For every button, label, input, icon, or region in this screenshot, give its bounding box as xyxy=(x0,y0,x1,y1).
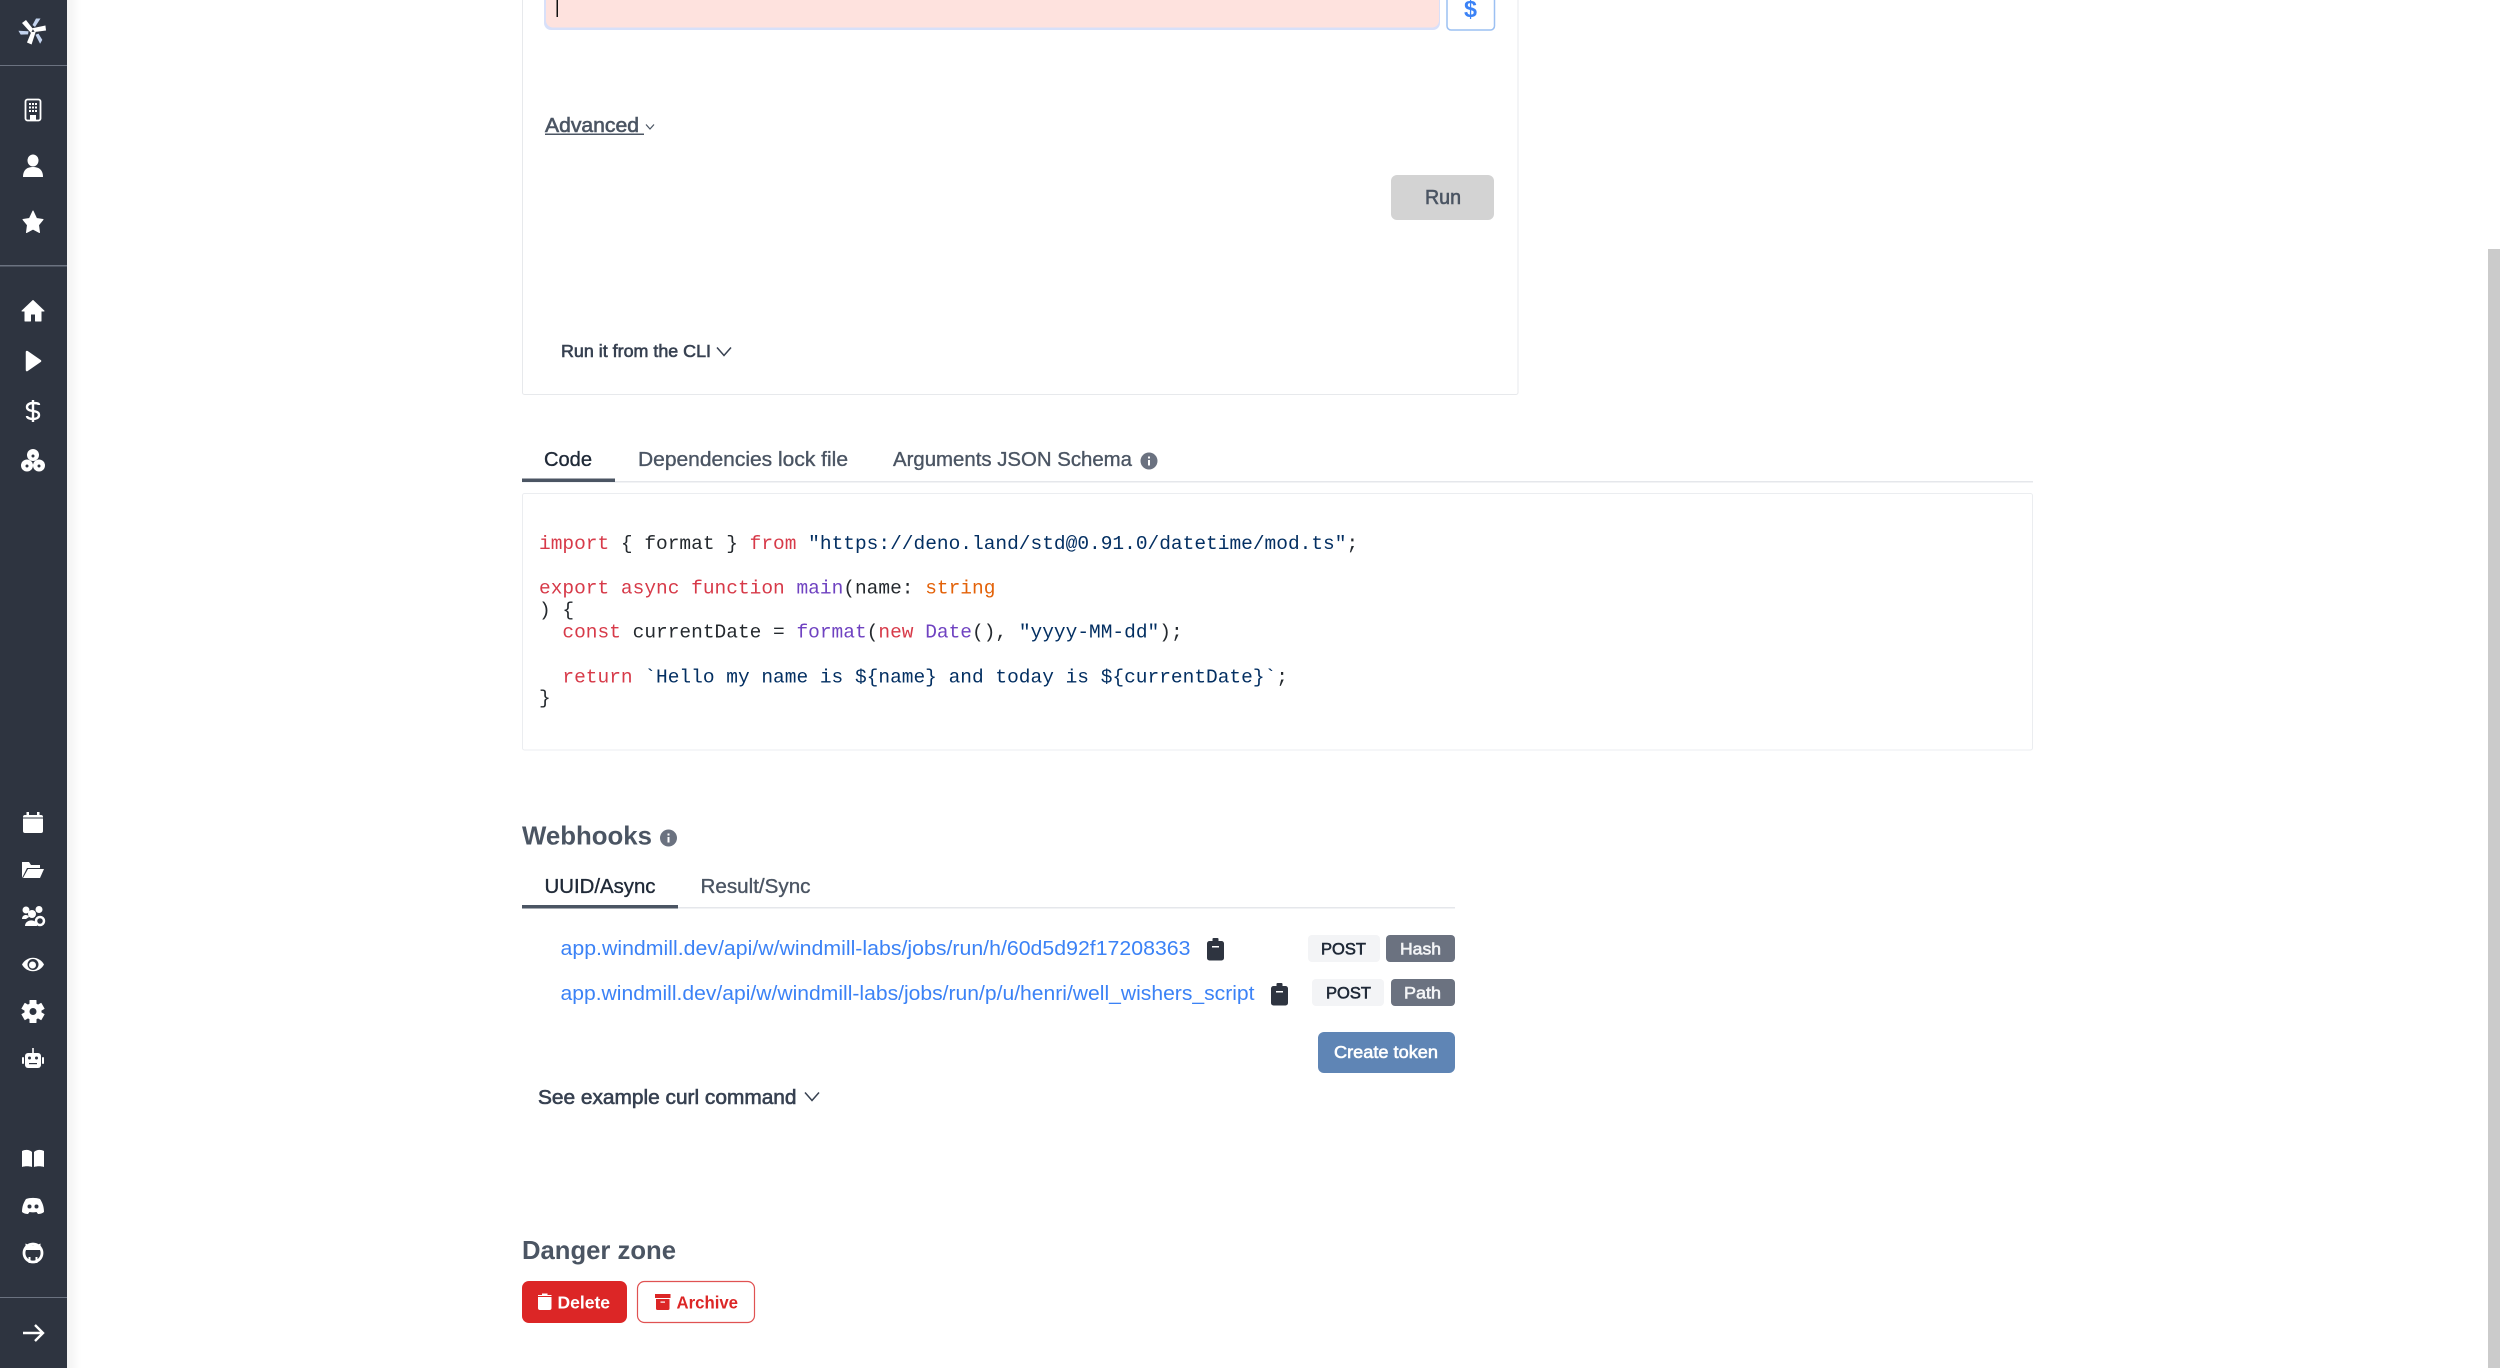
curl command toggle: See example curl command xyxy=(538,1087,796,1109)
icon: windmill logo xyxy=(18,18,48,46)
badge: POST: POST xyxy=(1326,984,1371,1002)
tabs: code tabs: Code xyxy=(544,449,592,471)
icon: info xyxy=(1140,452,1158,470)
icon: star xyxy=(23,211,43,232)
icon: play xyxy=(27,352,40,370)
webhook row: path: app.windmill.dev/api/w/windmill-labs/jobs/run/p/u/henri/well_wishers_script xyxy=(560,983,1255,1005)
tabs: webhook tabs: Result/Sync xyxy=(700,876,810,898)
icon: building xyxy=(26,100,40,120)
icon: settings gear xyxy=(22,1000,44,1022)
button: archive xyxy=(638,1282,754,1322)
panel: code block: return `Hello my name is ${name} and today is ${currentDate}`; xyxy=(539,666,1288,688)
icon: book xyxy=(22,1150,44,1167)
icon: user xyxy=(23,154,43,177)
icon: clipboard xyxy=(1271,983,1288,1006)
button: create token: Create token xyxy=(1334,1042,1438,1062)
icon: expand arrow xyxy=(23,1325,43,1341)
panel: code block: ) { xyxy=(539,600,574,622)
panel: code block xyxy=(522,494,2032,750)
webhook row: hash: app.windmill.dev/api/w/windmill-labs/jobs/run/h/60d5d92f17208363 xyxy=(560,938,1190,960)
sidebar xyxy=(0,0,67,1368)
button: create token xyxy=(1318,1032,1455,1073)
run button xyxy=(1391,175,1494,220)
badge: Path xyxy=(1391,979,1455,1006)
webhook row: path xyxy=(560,979,1455,1006)
tabs: code tabs: Dependencies lock file xyxy=(638,449,848,471)
icon: archive box xyxy=(655,1294,670,1310)
tabs: code tabs xyxy=(522,449,2033,482)
badge: POST xyxy=(1308,935,1380,962)
icon: trash xyxy=(538,1294,552,1310)
icon: calendar xyxy=(23,812,43,833)
tabs: webhook tabs xyxy=(522,876,1455,908)
badge: POST: POST xyxy=(1321,940,1366,958)
badge: POST xyxy=(1312,979,1384,1006)
icon: users cog xyxy=(22,906,44,926)
input field xyxy=(544,0,1440,30)
icon: info xyxy=(660,830,677,846)
tabs: webhook tabs: UUID/Async xyxy=(544,876,656,898)
icon: clipboard xyxy=(1207,938,1224,960)
button: delete: Delete xyxy=(558,1292,610,1312)
dollar toggle button xyxy=(1447,0,1494,30)
icon: dollar xyxy=(27,400,39,422)
panel: code block: } xyxy=(539,688,551,710)
panel: code block: import { format } from "https://deno.land/std@0.91.0/datetime/mod.ts"; xyxy=(539,533,1358,555)
panel: code block: export async function main(name: string xyxy=(539,578,995,600)
button: archive: Archive xyxy=(676,1292,738,1312)
heading: webhooks: Webhooks xyxy=(522,820,652,850)
icon: eye xyxy=(22,958,44,971)
badge: Path: Path xyxy=(1404,984,1441,1002)
icon: discord xyxy=(22,1198,44,1214)
icon: folder xyxy=(22,862,44,878)
button: delete xyxy=(522,1281,627,1323)
heading: danger zone: Danger zone xyxy=(522,1235,676,1265)
icon: github xyxy=(24,1244,42,1263)
tabs: code tabs: Arguments JSON Schema xyxy=(893,449,1133,471)
scrollbar xyxy=(2488,249,2500,1368)
panel: run form card xyxy=(522,0,1518,394)
advanced toggle: Advanced xyxy=(545,115,639,137)
run button: Run xyxy=(1425,187,1461,209)
badge: Hash xyxy=(1386,935,1455,962)
webhook row: hash xyxy=(560,935,1455,962)
badge: Hash: Hash xyxy=(1400,940,1441,958)
icon: home xyxy=(22,300,44,321)
run from CLI toggle: Run it from the CLI xyxy=(561,341,711,361)
panel: code block: const currentDate = format(new Date(), "yyyy-MM-dd"); xyxy=(539,622,1183,644)
icon: cubes xyxy=(21,449,45,472)
icon: robot xyxy=(22,1048,44,1068)
